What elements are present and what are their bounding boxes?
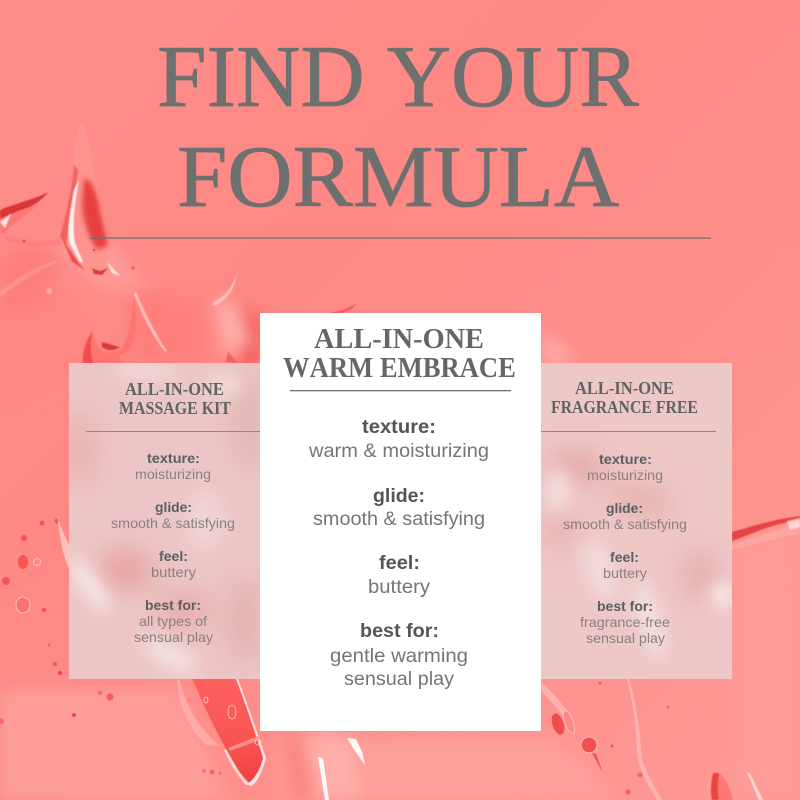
fragrance free details: fragrance-free (580, 614, 670, 630)
massage kit details: buttery (151, 564, 196, 580)
panel: massage kit (62, 363, 268, 680)
massage kit details: all types of (139, 613, 207, 629)
title (157, 28, 639, 226)
warm embrace heading: ALL-IN-ONE (314, 323, 484, 355)
small splash above centre panel (330, 304, 356, 314)
massage kit heading (119, 379, 232, 418)
fragrance free details: glide: (606, 500, 643, 516)
droplets at lower right (541, 679, 670, 800)
warm embrace details (308, 417, 489, 690)
panel: fragrance free (541, 363, 732, 679)
massage kit heading: ALL-IN-ONE (125, 379, 224, 399)
white gloss streaks at bottom centre (285, 735, 365, 800)
fragrance free details: sensual play (586, 630, 665, 646)
warm embrace details: sensual play (344, 669, 455, 690)
fragrance free details: smooth & satisfying (563, 516, 687, 532)
massage kit details: moisturizing (135, 466, 211, 482)
warm embrace details: glide: (373, 486, 425, 507)
warm embrace details: feel: (379, 553, 420, 574)
warm embrace heading: WARM EMBRACE (283, 352, 516, 384)
warm embrace details: smooth & satisfying (313, 509, 485, 530)
fold above left panel (82, 272, 238, 363)
fragrance free details (563, 451, 687, 646)
fragrance free heading: FRAGRANCE FREE (551, 397, 698, 417)
fragrance free details: buttery (603, 565, 647, 581)
massage kit details: sensual play (134, 629, 213, 645)
warm embrace heading (283, 323, 516, 384)
massage kit details: texture: (147, 450, 200, 466)
right edge streak (732, 516, 800, 550)
left edge streak (0, 192, 62, 297)
warm embrace details: gentle warming (330, 646, 468, 667)
massage kit details (111, 450, 235, 645)
massage kit details: smooth & satisfying (111, 515, 235, 531)
glossy drip at bottom right (711, 772, 763, 800)
small splashes (22, 240, 134, 294)
fragrance free details: texture: (599, 451, 652, 467)
fragrance free details: best for: (597, 598, 653, 614)
title: FIND YOUR (157, 28, 639, 126)
fragrance free heading (551, 378, 698, 417)
warm embrace details: best for: (360, 621, 439, 642)
slash and droplets at lower left (0, 679, 266, 786)
panel: warm embrace (260, 313, 541, 731)
warm embrace details: texture: (362, 417, 436, 438)
massage kit details: best for: (145, 597, 201, 613)
massage kit heading: MASSAGE KIT (119, 398, 232, 418)
title: FORMULA (177, 128, 619, 226)
fragrance free heading: ALL-IN-ONE (575, 378, 674, 398)
massage kit details: feel: (159, 548, 188, 564)
fragrance free details: moisturizing (587, 467, 663, 483)
left edge droplets (2, 515, 69, 675)
fragrance free details: feel: (610, 549, 639, 565)
peak fold (60, 122, 122, 276)
massage kit details: glide: (155, 499, 192, 515)
warm embrace details: warm & moisturizing (308, 441, 489, 462)
title rule (90, 238, 711, 239)
warm embrace details: buttery (368, 577, 431, 598)
